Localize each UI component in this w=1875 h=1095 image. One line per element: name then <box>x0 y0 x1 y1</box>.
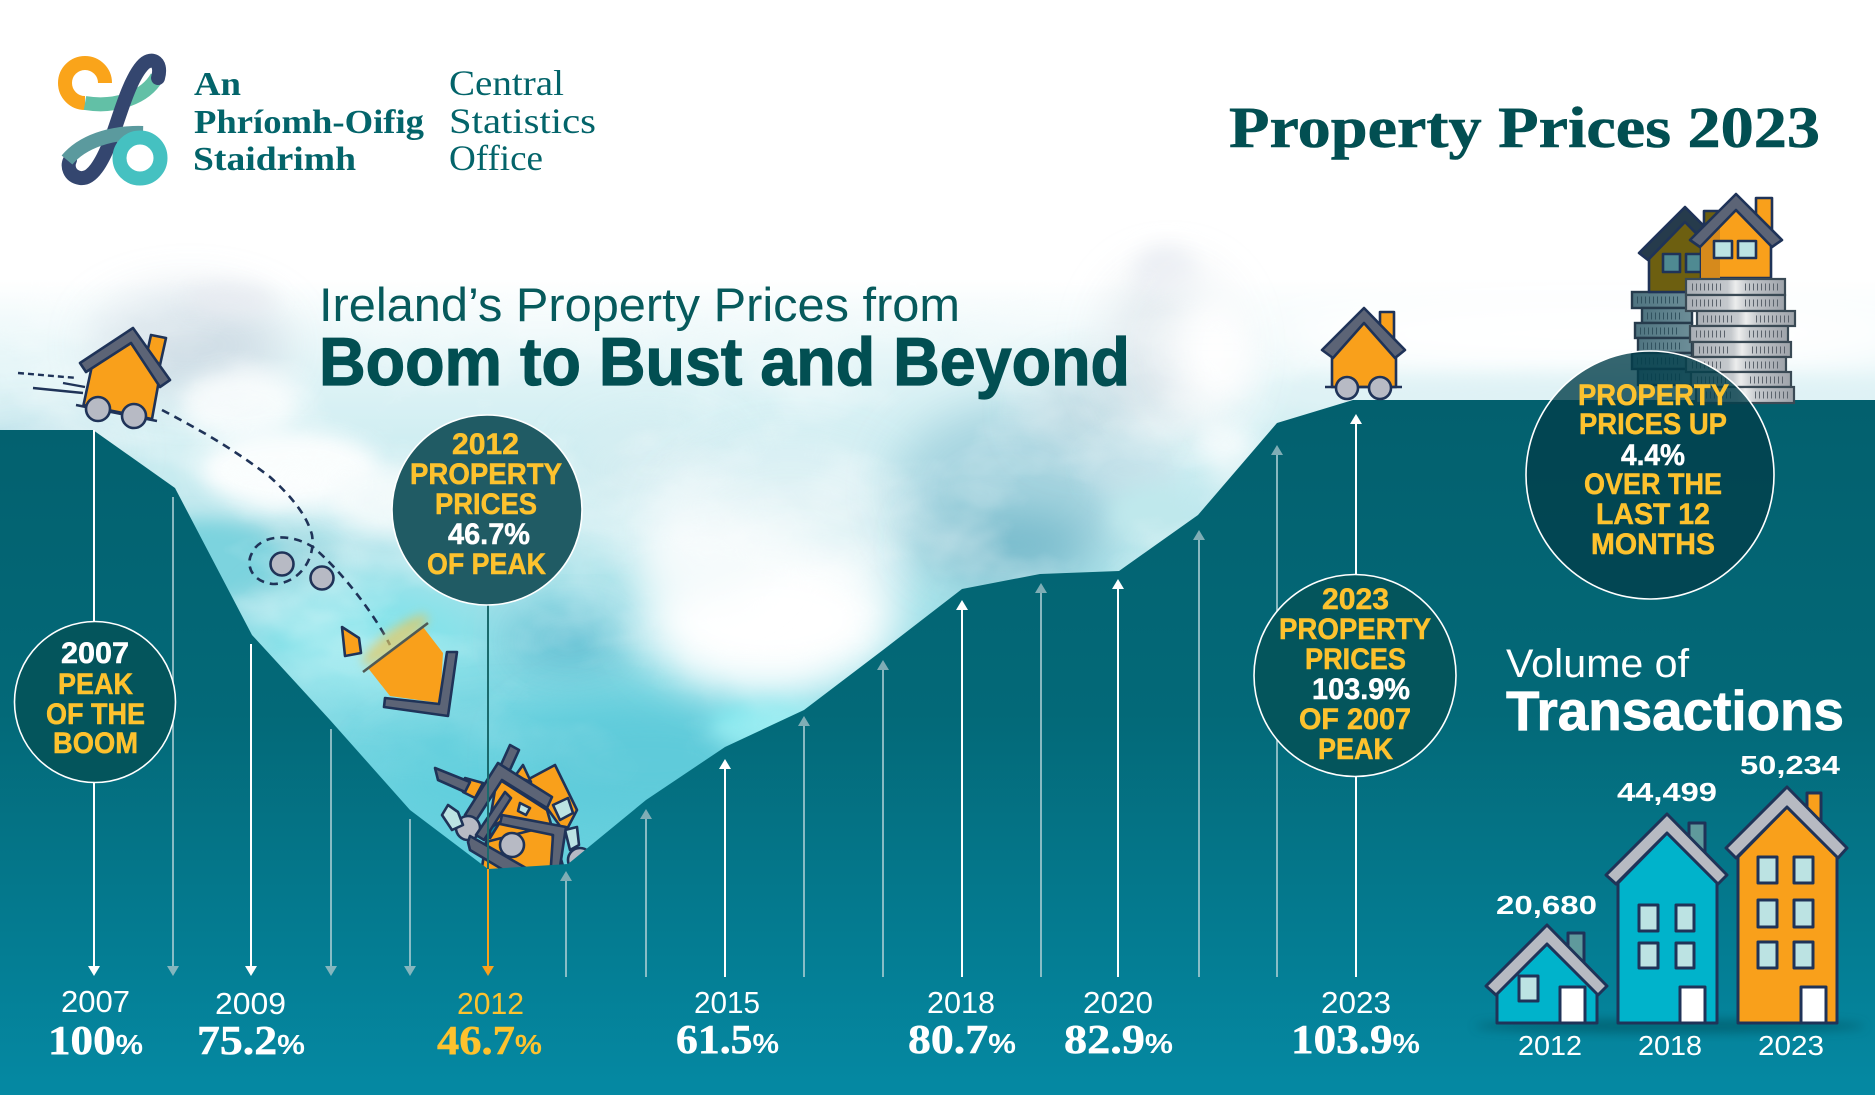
callout: 2007 peak: PEAK <box>58 668 133 701</box>
transactions house chart <box>1475 750 1865 1061</box>
callout: up 4.4 percent <box>1526 351 1774 599</box>
callout: 2023 prices: PRICES <box>1305 643 1406 676</box>
2015 label: 61.5% <box>676 1016 779 1062</box>
2018 label: 2018 <box>927 985 995 1020</box>
mountain chart of price index <box>0 400 1875 1095</box>
callout: 2007 peak: OF THE <box>46 698 145 731</box>
callout: 2023 prices: PEAK <box>1318 733 1393 766</box>
title: Property Prices 2023 <box>1229 95 1820 160</box>
2012 arrow <box>487 600 489 869</box>
chart heading: Ireland’s Property Prices from <box>319 278 960 331</box>
down arrows <box>167 497 416 976</box>
2009 label: 75.2 % <box>197 1017 305 1063</box>
crashed house rubble <box>435 745 592 880</box>
callout: 2023 prices: PROPERTY <box>1279 613 1431 646</box>
callout: up 4.4 percent: LAST 12 <box>1596 498 1710 531</box>
callout: up 4.4 percent: 4.4% <box>1621 439 1685 472</box>
silver coin stack <box>1686 279 1795 403</box>
2023 label: 2023 <box>1321 985 1391 1020</box>
logo text: English: Central <box>449 63 564 103</box>
chart heading <box>319 278 1130 400</box>
callout: up 4.4 percent: MONTHS <box>1591 528 1715 561</box>
dark house <box>1639 207 1731 292</box>
2007 label <box>48 984 143 1063</box>
callout: 2012 prices: PROPERTY <box>410 458 562 491</box>
callout: 2007 peak: BOOM <box>53 727 138 760</box>
transactions heading: Transactions <box>1506 679 1844 742</box>
house 2012 <box>1486 890 1607 1061</box>
callout: 2007 peak: 2007 <box>61 637 129 670</box>
callout: 2023 prices <box>1254 574 1456 776</box>
callout: up 4.4 percent: PRICES UP <box>1579 408 1727 441</box>
logo text: Irish: Phríomh-Oifig <box>194 104 424 141</box>
sky background with clouds <box>0 244 1875 864</box>
trend arrows <box>88 414 1362 977</box>
rolling wheels <box>270 552 334 590</box>
2009 label <box>197 986 305 1063</box>
house 2023 <box>1726 750 1847 1061</box>
callout: 2012 prices <box>392 415 582 605</box>
2009 label: 2009 <box>215 986 286 1021</box>
2020 label: 82.9 % <box>1064 1016 1173 1062</box>
motion lines <box>18 373 85 393</box>
tumbling house mid-fall <box>342 608 457 716</box>
callout: 2012 prices: OF PEAK <box>427 548 546 581</box>
house 2018 <box>1606 777 1727 1061</box>
orange house <box>1690 194 1782 278</box>
transactions heading: Volume of <box>1506 642 1690 686</box>
2018 label <box>908 985 1016 1062</box>
callout: up 4.4 percent: OVER THE <box>1584 468 1722 501</box>
2015 label <box>676 985 779 1062</box>
callout: 2012 prices: PRICES <box>435 488 537 521</box>
callout: 2023 prices: 103.9% <box>1312 673 1410 706</box>
logo text: English: Statistics <box>449 101 596 141</box>
dark coin stack <box>1632 292 1692 385</box>
callout: 2012 prices: 2012 <box>452 428 519 461</box>
2015 label: 2015 <box>694 985 760 1020</box>
2007 label: 2007 <box>61 984 130 1019</box>
logo text: Irish: An <box>194 66 241 103</box>
2012 label: 46.7% <box>437 1017 542 1063</box>
logo text: Irish <box>193 66 424 178</box>
2018 label: 80.7 % <box>908 1016 1016 1062</box>
callout: 2012 prices: 46.7% <box>448 518 530 551</box>
dashed trajectory <box>162 410 390 645</box>
callout: 2023 prices: 2023 <box>1322 583 1389 616</box>
falling house with wheels and dashed trajectory <box>18 328 390 645</box>
house 2018: 2018 <box>1638 1030 1702 1061</box>
callout: 2023 prices: OF 2007 <box>1299 703 1411 736</box>
chart heading: Boom to Bust and Beyond <box>319 324 1130 400</box>
logo mark <box>65 61 160 179</box>
2023 label: 103.9 % <box>1291 1016 1420 1062</box>
logo text: English <box>449 63 596 178</box>
callout: 2007 peak <box>14 622 176 782</box>
houses on stacks of coins <box>1632 194 1795 403</box>
house at the peak <box>76 328 170 428</box>
2007 label: 100% <box>48 1017 143 1063</box>
up arrows <box>560 445 1283 977</box>
house 2012: 2012 <box>1518 1030 1582 1061</box>
2020 label: 2020 <box>1083 985 1153 1020</box>
2012 label: 2012 <box>457 986 524 1021</box>
2020 label <box>1064 985 1173 1062</box>
year and index labels <box>48 984 1420 1063</box>
house 2012: 20,680 <box>1496 890 1597 920</box>
house 2018: 44,499 <box>1617 777 1717 807</box>
house 2023: 50,234 <box>1740 750 1841 780</box>
house on wheels at the top <box>1322 308 1405 399</box>
house 2023: 2023 <box>1758 1030 1824 1061</box>
transactions heading <box>1506 642 1844 742</box>
logo text: English: Office <box>449 138 543 178</box>
2012 label <box>437 986 542 1063</box>
logo text: Irish: Staidrimh <box>193 141 356 178</box>
callout: up 4.4 percent: PROPERTY <box>1578 379 1729 412</box>
2023 label <box>1291 985 1420 1062</box>
